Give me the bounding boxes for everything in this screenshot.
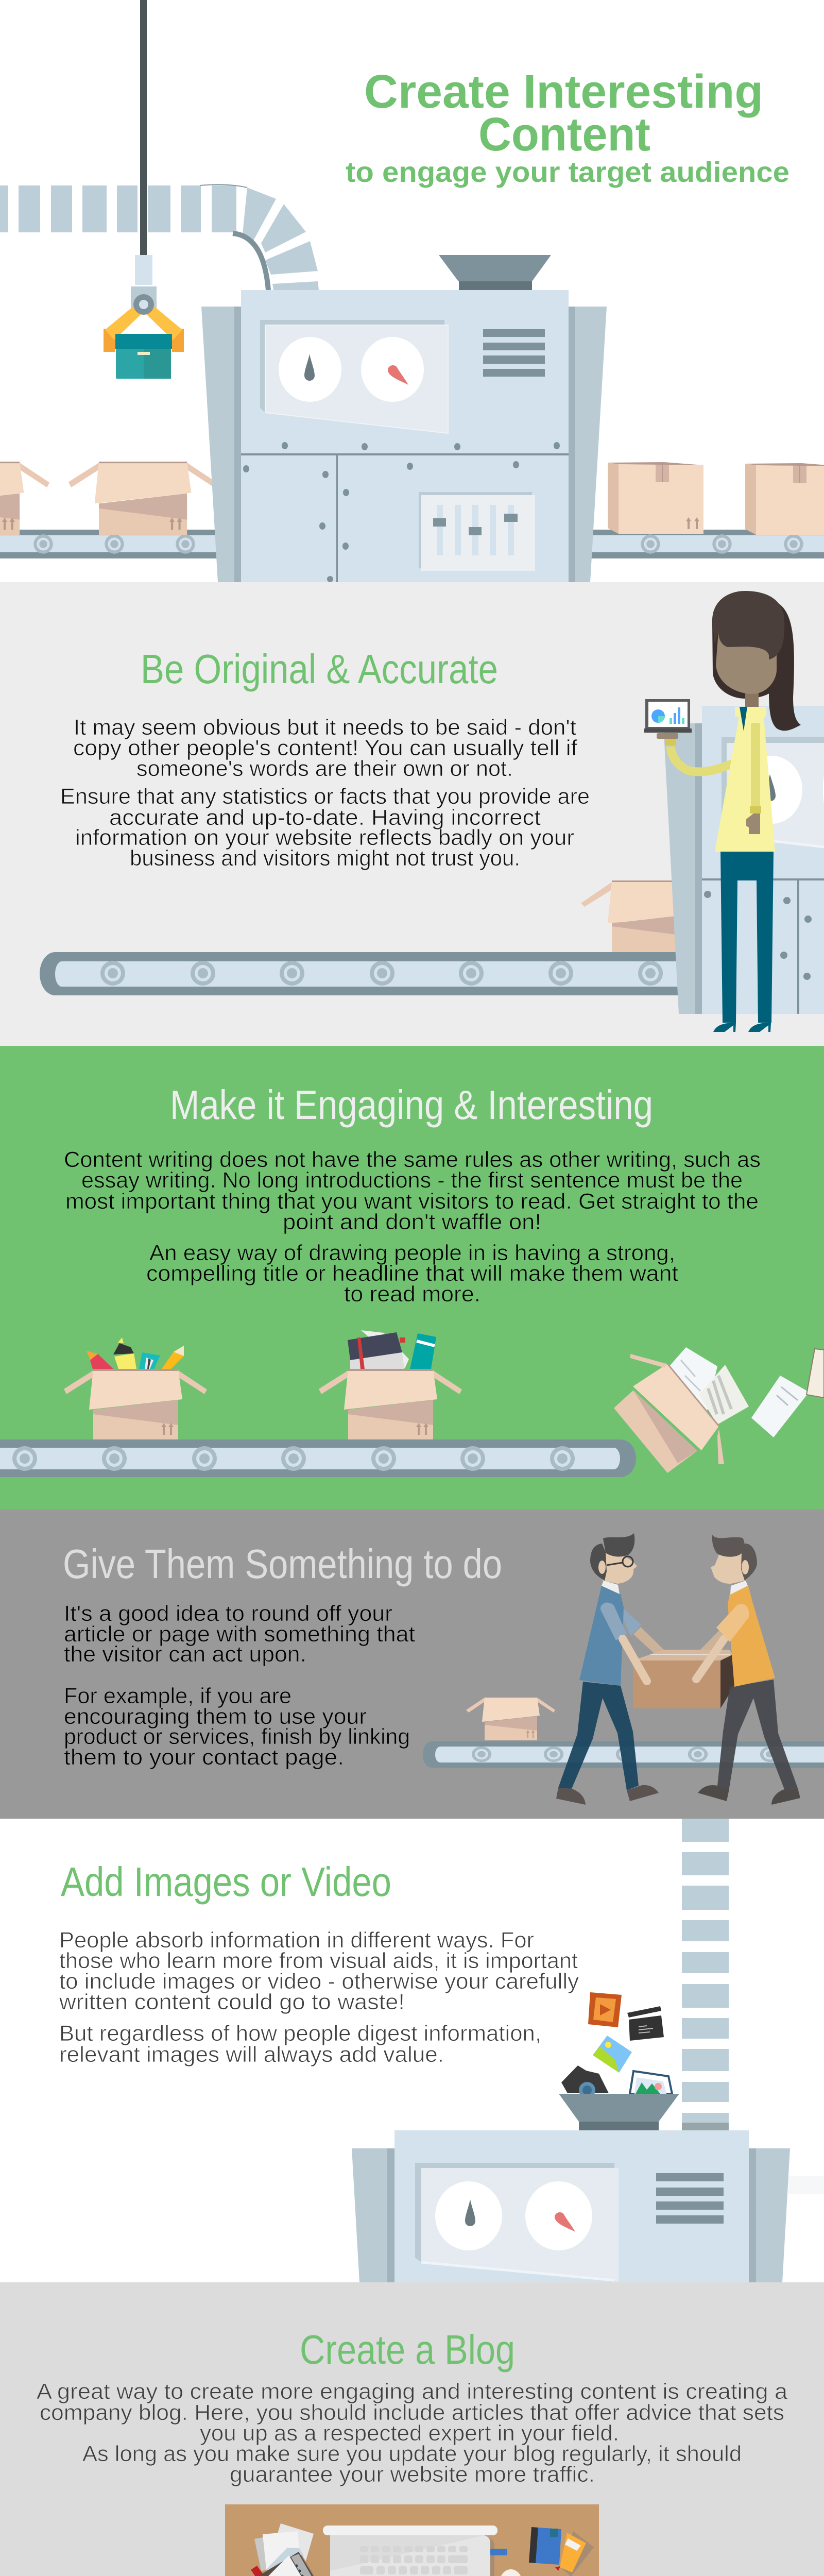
conveyor belt [423,1741,824,1768]
body text: them to your contact page. [64,1745,344,1770]
heading: Be Original & Accurate [141,646,498,692]
title: Content [478,108,650,161]
body text: A great way to create more engaging and interesting content is creating a [37,2379,787,2404]
body text [37,2379,787,2487]
woman holding laptop [644,591,801,1032]
laptop [323,2526,507,2576]
heading: Add Images or Video [61,1859,391,1905]
box entering machine [581,880,684,952]
body text: relevant images will always add value. [59,2042,444,2067]
vertical duct [682,1819,729,2130]
machine [201,255,607,582]
man in orange shirt [696,1535,800,1805]
papers and notebook [232,2523,330,2576]
body text: to include images or video - otherwise your carefully [59,1969,579,1994]
desk [225,2504,599,2576]
open boxes on belt [0,462,217,535]
body text [64,1601,415,1770]
body text: to read more. [344,1282,480,1307]
panel: make it engaging and interesting [0,1046,824,1510]
body text: someone's words are their own or not. [136,756,513,781]
icon: photo [593,2036,632,2073]
body text: accurate and up-to-date. Having incorrect [109,805,541,830]
body text: article or page with something that [64,1622,415,1647]
icon: clapperboard [627,2006,664,2041]
body text: guarantee your website more traffic. [230,2462,595,2487]
body text: company blog. Here, you should include articles that offer advice that sets [40,2400,784,2425]
crane arm holding teal box [104,0,184,379]
panel: be original and accurate [0,582,824,1046]
body text: Content writing does not have the same rules as other writing, such as [64,1147,761,1172]
title: to engage your target audience [346,156,789,188]
body text: As long as you make sure you update your blog regularly, it should [82,2442,742,2466]
machine with hopper [352,2094,790,2282]
body text: business and visitors might not trust you. [130,846,520,871]
conveyor belt [40,952,680,995]
body text: An easy way of drawing people in is having a strong, [149,1241,675,1265]
body text: you up as a respected expert in your field. [200,2421,619,2446]
small open box [466,1698,555,1740]
body text: Ensure that any statistics or facts that you provide are [60,784,590,809]
body text: the visitor can act upon. [64,1642,306,1667]
body text: It may seem obvious but it needs to be said - don't [74,715,576,740]
body text: written content could go to waste! [59,1990,405,2014]
large carried box [633,1627,734,1708]
body text: copy other people's content! You can usually tell if [73,736,578,760]
icon: framed picture [630,2071,672,2094]
icon: film strip [588,1992,622,2027]
faint belt behind machine [788,2176,824,2194]
body text [64,1147,761,1307]
icon: camera [561,2065,609,2098]
machine [663,706,824,1014]
heading: Give Them Something to do [63,1541,502,1587]
panel: create a blog [0,2282,824,2576]
duct pipe [0,184,319,290]
panel: add images or video [0,1819,824,2282]
conveyor belt [0,1439,636,1477]
body text: compelling title or headline that will make them want [146,1261,678,1286]
stationery in box [87,1337,184,1369]
body text: It's a good idea to round off your [64,1601,392,1626]
body text: But regardless of how people digest information, [59,2021,541,2046]
panel: header with machine [0,0,824,582]
title [346,65,789,188]
body text: essay writing. No long introductions - the first sentence must be the [81,1168,743,1193]
body text: those who learn more from visual aids, it is important [59,1948,578,1973]
man with glasses, blue shirt [556,1533,659,1805]
person at desk, from above [501,2569,521,2576]
body text [60,715,590,871]
heading: Make it Engaging & Interesting [170,1082,653,1128]
body text: encouraging them to use your [64,1704,367,1729]
body text: information on your website reflects badly on your [75,825,574,850]
body text: For example, if you are [64,1684,291,1708]
title: Create Interesting [364,65,763,118]
body text: most important thing that you want visitors to read. Get straight to the [65,1189,759,1214]
open box 2 [319,1369,462,1439]
books in box [348,1330,436,1369]
body text [59,1928,579,2067]
body text: point and don't waffle on! [283,1210,541,1234]
open box 1 [64,1369,207,1439]
heading: Create a Blog [300,2327,515,2372]
closed boxes on belt [608,462,824,535]
body text: People absorb information in different ways. For [59,1928,534,1953]
notebooks [529,2527,594,2576]
conveyor belt [0,530,824,558]
panel: give them something to do [0,1510,824,1819]
body text: product or services, finish by linking [64,1724,410,1749]
tipped box spilling papers [614,1347,824,1473]
